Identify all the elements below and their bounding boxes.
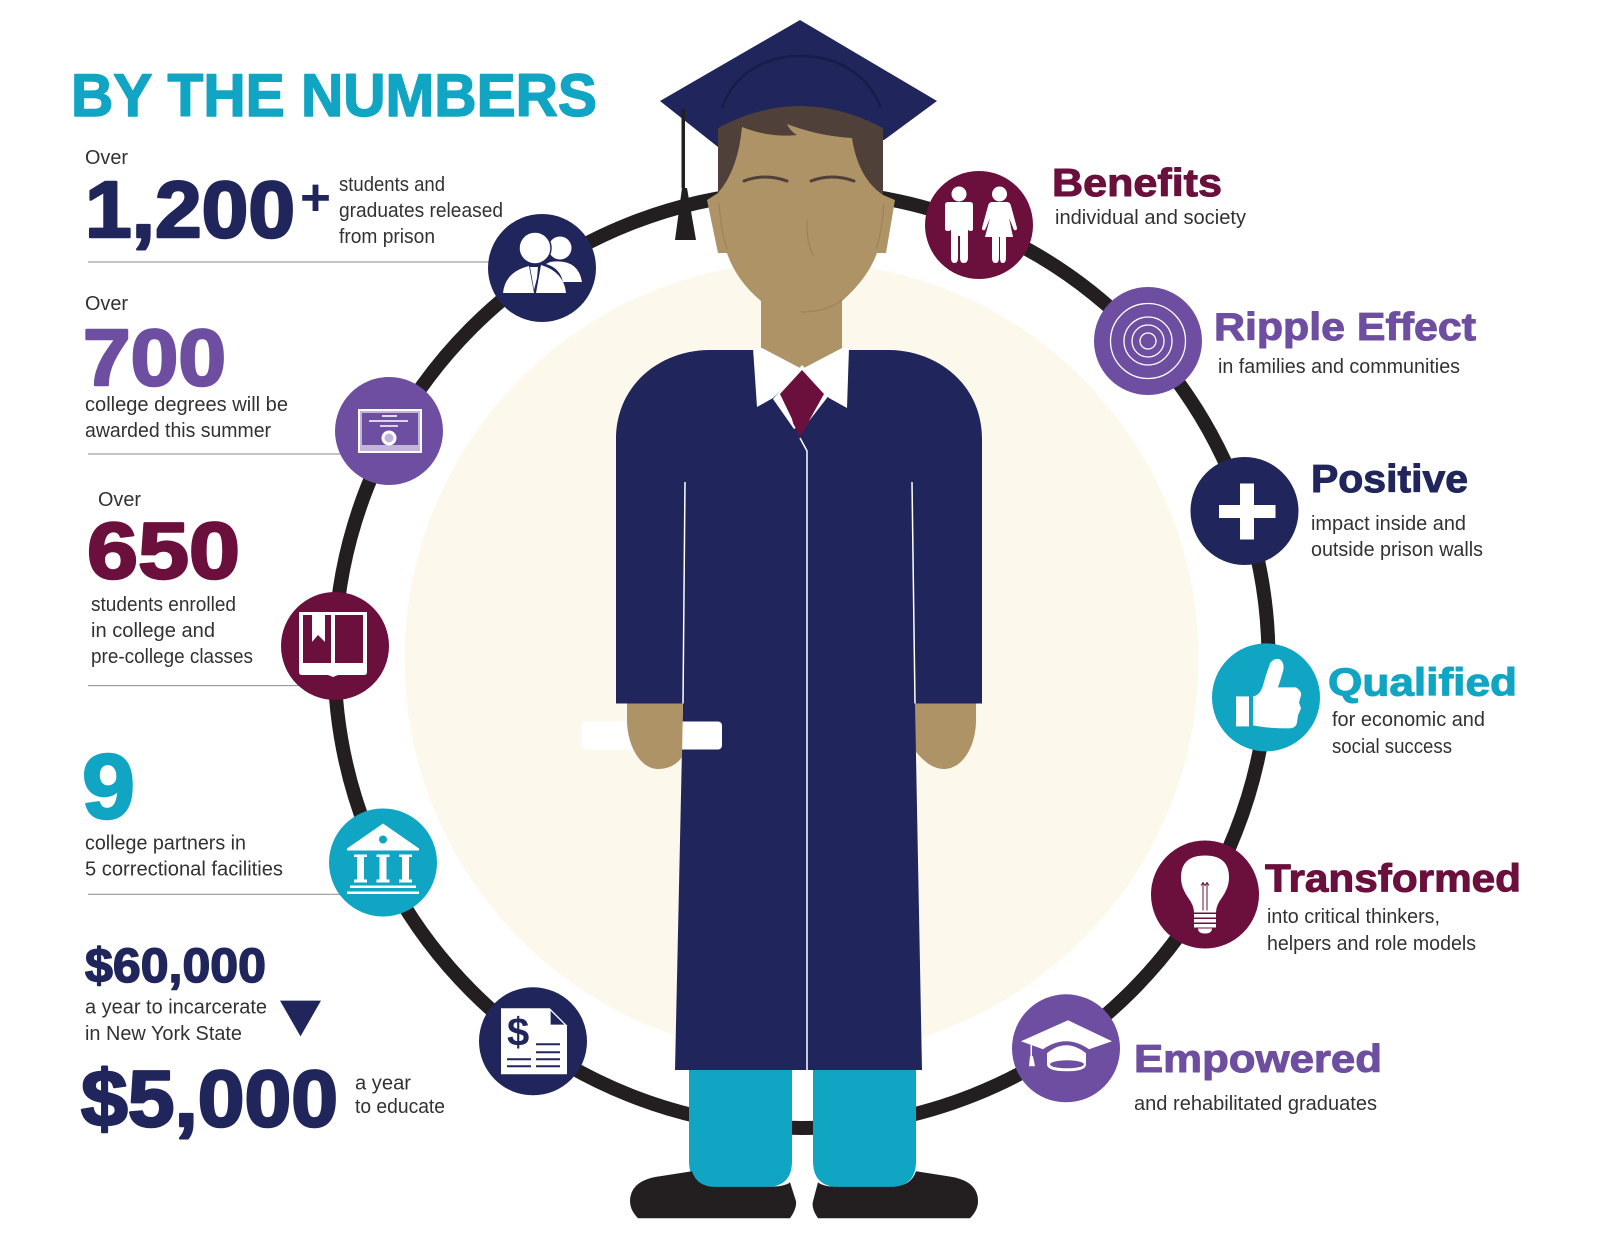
icon: thumbs up	[1212, 643, 1320, 751]
stat: 1,200+ released	[85, 147, 503, 254]
stat: cost comparison: a year	[355, 1072, 411, 1094]
stat: 9 partners: college partners in	[85, 832, 246, 854]
label: Qualified: for economic and	[1332, 709, 1485, 731]
arrow: down triangle	[280, 1001, 321, 1036]
cream background circle	[404, 262, 1198, 1056]
pants	[689, 1066, 916, 1187]
label: Empowered: Empowered	[1134, 1038, 1382, 1081]
label: Benefits	[1052, 162, 1246, 229]
label: Empowered: and rehabilitated graduates	[1134, 1093, 1377, 1115]
stat: 9 partners	[82, 736, 283, 880]
right hand	[912, 703, 976, 769]
label: Benefits: Benefits	[1052, 162, 1222, 205]
icon: man and woman	[925, 171, 1033, 279]
stat: cost comparison: to educate	[355, 1096, 445, 1118]
label: Ripple Effect: in families and communities	[1218, 356, 1460, 378]
stat: cost comparison: $60,000	[85, 940, 266, 993]
label: Empowered	[1134, 1038, 1382, 1115]
stat: cost comparison	[81, 940, 445, 1143]
icon: dollar document: $	[507, 1010, 529, 1054]
stat: cost comparison: $5,000	[81, 1054, 338, 1143]
icon: two people	[488, 214, 596, 322]
gown	[616, 350, 982, 1070]
stat: 650 students: in college and	[91, 620, 215, 642]
icon: graduation cap	[1012, 994, 1120, 1102]
shoes	[630, 1171, 978, 1218]
icon: diploma certificate	[335, 377, 443, 485]
icon: open book	[281, 592, 389, 700]
icon: plus sign	[1190, 457, 1298, 565]
shirt collar	[753, 348, 849, 429]
label: Ripple Effect	[1214, 306, 1476, 378]
head and neck	[707, 124, 895, 369]
label: Qualified	[1328, 662, 1517, 758]
label: Positive	[1311, 458, 1483, 561]
diploma	[582, 722, 722, 750]
label: Qualified: social success	[1332, 736, 1452, 758]
label: Positive: outside prison walls	[1311, 539, 1483, 561]
label: Transformed: Transformed	[1265, 858, 1521, 900]
stat: cost comparison: in New York State	[85, 1023, 242, 1045]
tassel	[675, 109, 696, 240]
left hand	[627, 704, 683, 769]
label: Positive: impact inside and	[1311, 513, 1466, 535]
stat: 700 degrees	[83, 293, 288, 442]
stat: 9 partners: 5 correctional facilities	[85, 858, 283, 880]
stat: 700 degrees: college degrees will be	[85, 394, 288, 416]
title: BY THE NUMBERS	[71, 62, 597, 129]
stat: 1,200+ released: 1,200	[85, 165, 295, 254]
stat: 9 partners: 9	[82, 736, 135, 838]
black ring connecting icons	[334, 191, 1268, 1128]
label: Ripple Effect: Ripple Effect	[1214, 306, 1476, 349]
icon: bank building	[329, 808, 437, 916]
stat: 700 degrees: awarded this summer	[85, 420, 271, 442]
graduate figure	[582, 20, 982, 1218]
stat: cost comparison: a year to incarcerate	[85, 996, 267, 1018]
label: Qualified: Qualified	[1328, 662, 1517, 704]
label: Benefits: individual and society	[1055, 207, 1246, 229]
stat: 1,200+ released: from prison	[339, 226, 435, 248]
stat: 650 students: students enrolled	[91, 594, 236, 616]
icon: ripple target	[1094, 287, 1202, 395]
stat: 700 degrees: Over	[85, 293, 128, 315]
stat: 650 students: 650	[87, 506, 240, 595]
stat: 1,200+ released: students and	[339, 174, 445, 196]
label: Transformed: into critical thinkers,	[1267, 906, 1440, 928]
icon: dollar document	[479, 987, 587, 1095]
stat: 700 degrees: 700	[83, 313, 226, 402]
mortarboard cap	[660, 20, 937, 147]
necktie	[780, 370, 824, 437]
label: Positive: Positive	[1311, 458, 1468, 501]
icon: light bulb	[1151, 840, 1259, 948]
hair	[718, 106, 883, 200]
gown seam lines	[683, 438, 915, 1070]
label: Transformed	[1265, 858, 1521, 955]
stat: 1,200+ released: Over	[85, 147, 128, 169]
label: Transformed: helpers and role models	[1267, 933, 1476, 955]
facial details	[719, 177, 884, 312]
stat: 650 students: Over	[98, 489, 141, 511]
stat: 650 students: pre-college classes	[91, 646, 253, 668]
stat: 1,200+ released: graduates released	[339, 200, 503, 222]
stat: 650 students	[87, 489, 253, 668]
stat: 1,200+ released: +	[300, 169, 331, 227]
